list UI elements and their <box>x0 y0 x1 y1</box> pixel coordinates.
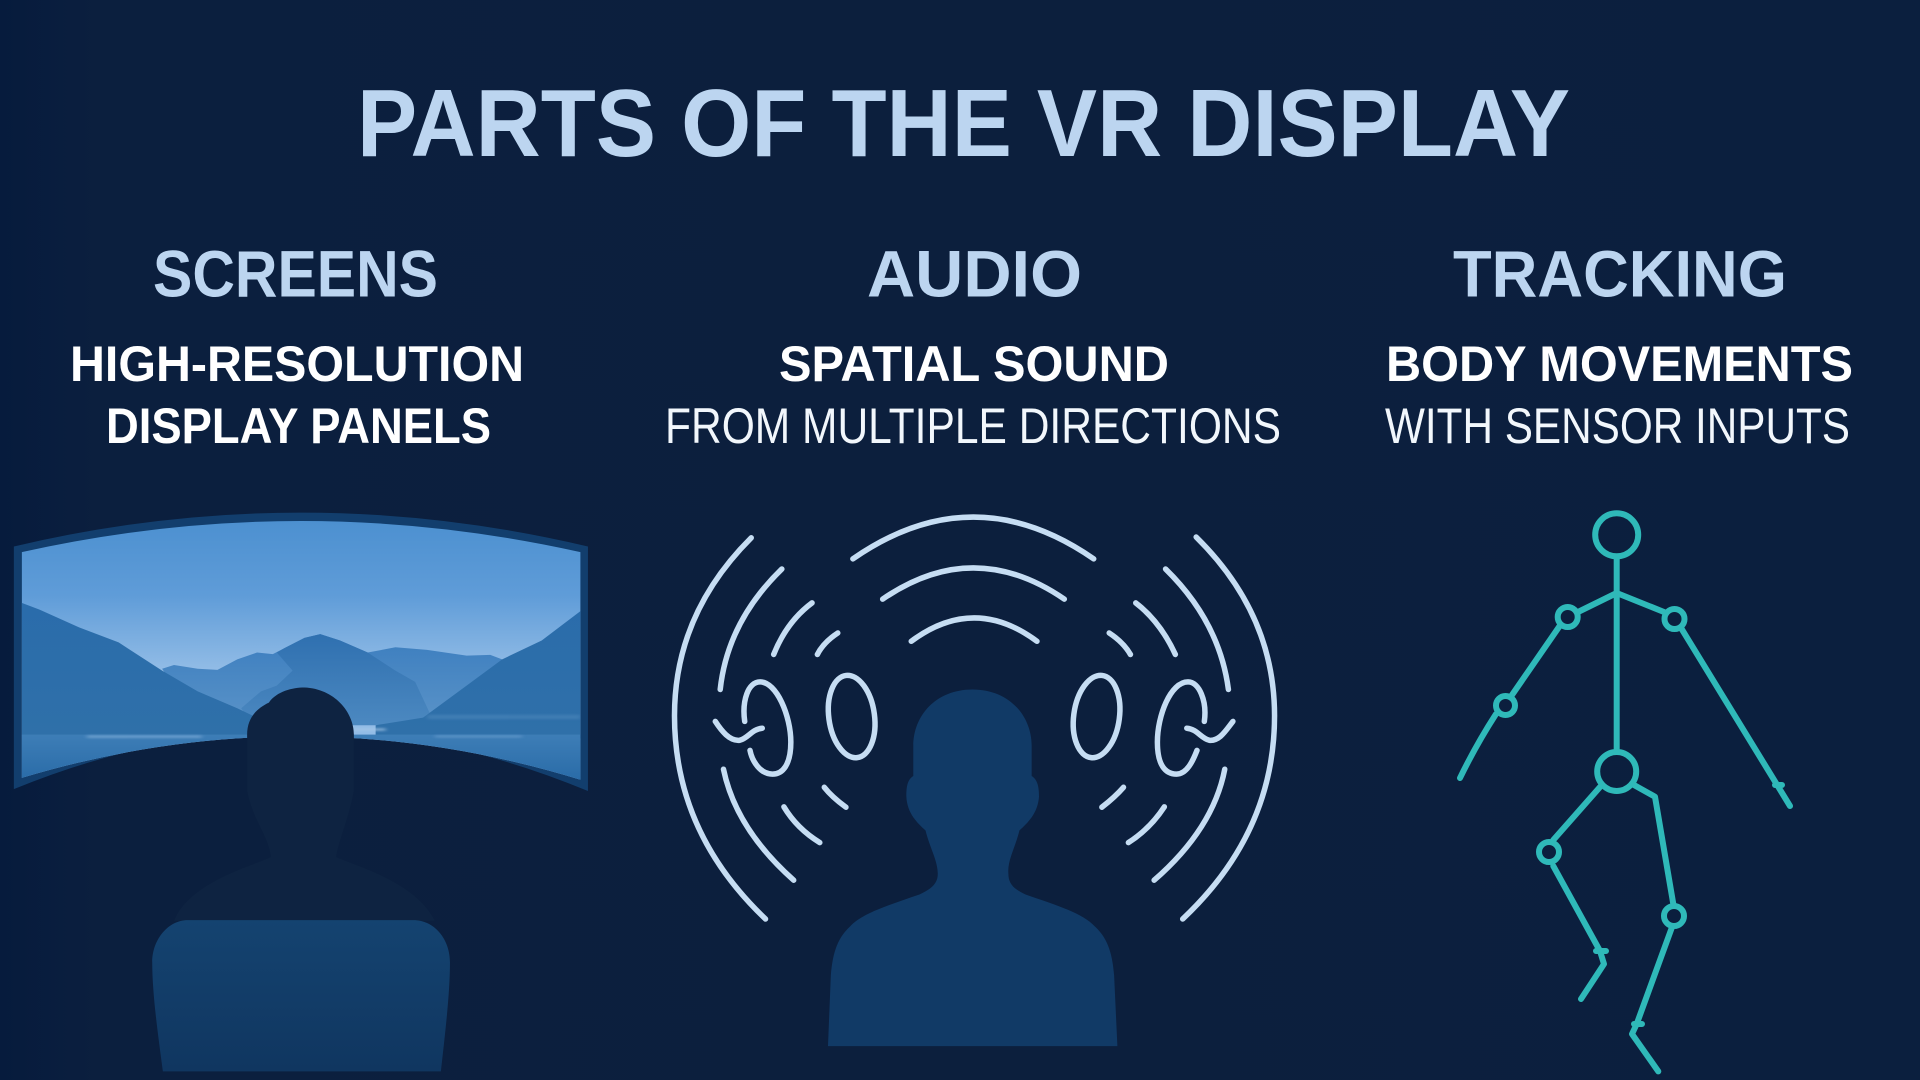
heading: audio: AUDIO <box>867 236 1082 310</box>
sound waves right <box>1102 537 1275 919</box>
text block: screens description <box>70 336 524 454</box>
mountain landscape <box>16 513 585 784</box>
text block: tracking description: BODY MOVEMENTS <box>1386 336 1853 392</box>
sound waves left <box>674 538 846 919</box>
screen frame <box>14 513 588 791</box>
title: PARTS OF THE VR DISPLAY <box>357 70 1570 177</box>
text block: screens description: HIGH-RESOLUTION <box>70 336 524 392</box>
icon: right ear <box>1068 673 1233 774</box>
text block: tracking description <box>1385 336 1853 454</box>
panel: audio <box>665 236 1281 1046</box>
listener silhouette <box>828 689 1117 1046</box>
viewer torso <box>152 920 450 1071</box>
text block: tracking description: WITH SENSOR INPUTS <box>1385 398 1850 454</box>
illustration: skeleton tracking figure <box>1460 513 1790 1071</box>
text block: audio description <box>665 336 1281 454</box>
viewer silhouette <box>174 688 435 921</box>
text block: screens description: DISPLAY PANELS <box>106 398 491 454</box>
icon: left ear <box>715 673 880 774</box>
left leg <box>1539 787 1606 999</box>
text block: audio description: SPATIAL SOUND <box>779 336 1169 392</box>
panel: tracking <box>1385 236 1853 1071</box>
panel: screens <box>14 236 588 1071</box>
text block: audio description: FROM MULTIPLE DIRECTIONS <box>665 398 1281 454</box>
illustration: listener with sound waves <box>674 517 1275 1046</box>
illustration: curved screen and viewer <box>14 513 588 1071</box>
pelvis joint <box>1597 752 1636 791</box>
right leg <box>1632 785 1684 1071</box>
sound waves from above <box>853 517 1094 641</box>
right arm <box>1664 609 1790 806</box>
heading: screens: SCREENS <box>153 236 438 310</box>
spine and shoulders <box>1578 557 1664 750</box>
head joint <box>1595 513 1638 556</box>
heading: tracking: TRACKING <box>1453 236 1787 310</box>
left arm <box>1460 607 1578 778</box>
